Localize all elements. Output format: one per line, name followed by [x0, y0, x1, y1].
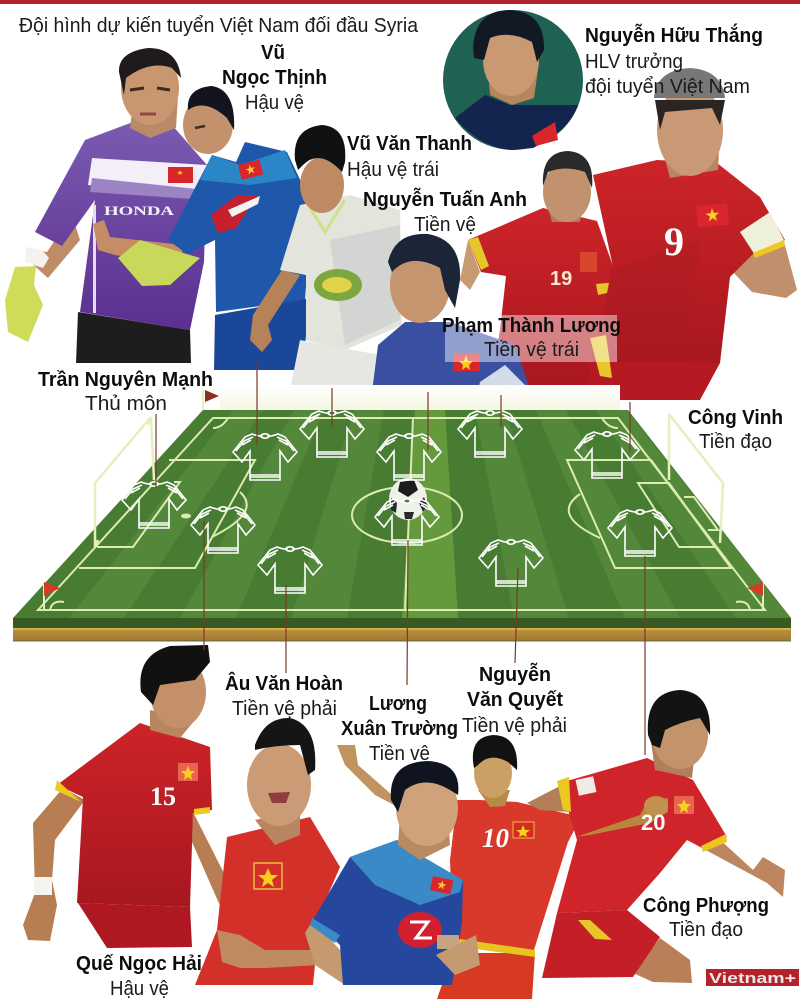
label: Công Phượng [643, 895, 769, 941]
shirt 8 [458, 410, 522, 457]
shirt 1 [122, 481, 186, 528]
label: Công Vinh: Tiền đạo [699, 431, 772, 453]
label: Công Phượng: Tiền đạo [669, 919, 743, 941]
jersey sponsor: HONDA [104, 203, 175, 218]
corner flag: bottom left [44, 582, 60, 610]
player photo: Xuân Trường (arm of Nguyễn Văn Quyết behind) [337, 745, 394, 805]
goal: left [95, 417, 154, 547]
top red bar [0, 0, 800, 4]
logo: Vietnam+ [706, 969, 799, 987]
label: Phạm Thành Lương: Phạm Thành Lương [442, 315, 621, 337]
label: Nguyễn Hữu Thắng [585, 23, 763, 98]
formation shirts [122, 410, 672, 593]
label: Lương Xuân Trường: Lương [369, 693, 427, 715]
player photo: Nguyễn Văn Quyết [437, 735, 581, 999]
label: Vũ Văn Thanh: Hậu vệ trái [347, 159, 439, 181]
label: Nguyễn Tuấn Anh: Tiền vệ [414, 214, 476, 236]
label: Phạm Thành Lương [442, 315, 621, 361]
shirt 3 [258, 546, 322, 593]
shirt 9 [479, 539, 543, 586]
label: Quế Ngọc Hải [76, 953, 202, 1000]
label: Vũ Ngọc Thịnh: Vũ [261, 42, 285, 64]
label: Vũ Văn Thanh [347, 133, 472, 181]
player photo: Âu Văn Hoàn [195, 718, 340, 985]
coach photo: Nguyễn Hữu Thắng [443, 10, 583, 150]
football pitch [13, 390, 791, 642]
shirt 10 [575, 431, 639, 478]
label: Vũ Ngọc Thịnh: Hậu vệ [245, 92, 304, 114]
label: Nguyễn Hữu Thắng: Nguyễn Hữu Thắng [585, 23, 763, 47]
corner flag: bottom right [747, 582, 763, 610]
label: Trần Nguyên Mạnh [38, 369, 213, 415]
title: Đội hình dự kiến tuyển Việt Nam đối đầu Syria [19, 15, 419, 37]
label: Âu Văn Hoàn: Âu Văn Hoàn [225, 671, 343, 695]
player photo: Công Vinh [587, 68, 797, 400]
label: Vũ Ngọc Thịnh: Ngọc Thịnh [222, 67, 327, 89]
label: Vũ Ngọc Thịnh [222, 42, 327, 114]
label: Nguyễn Hữu Thắng: HLV trưởng [585, 51, 683, 73]
player photo: Lương Xuân Trường [305, 761, 480, 985]
label: Công Phượng: Công Phượng [643, 895, 769, 917]
shirt 6 [377, 433, 441, 480]
label: Phạm Thành Lương: Tiền vệ trái [484, 339, 579, 361]
player photo: Nguyễn Văn Quyết: 10 [482, 823, 510, 853]
label: Âu Văn Hoàn: Tiền vệ phải [232, 698, 337, 720]
player photo: Vũ Ngọc Thịnh [93, 86, 312, 370]
shirt 11 [608, 509, 672, 556]
player photo: Quế Ngọc Hải: 15 [150, 782, 176, 811]
pitch turf [13, 410, 791, 618]
label: Lương Xuân Trường: Xuân Trường [341, 718, 458, 740]
turf stripes [69, 410, 791, 618]
label: Quế Ngọc Hải: Quế Ngọc Hải [76, 953, 202, 975]
pitch markings [38, 418, 765, 610]
label: Nguyễn Hữu Thắng: đội tuyển Việt Nam [585, 76, 750, 98]
player photo: Phạm Thành Lương: 19 [550, 268, 572, 290]
label: Âu Văn Hoàn [225, 671, 343, 720]
label: Lương Xuân Trường [341, 693, 458, 765]
player photo: Công Phượng: 20 [641, 810, 665, 835]
label: Trần Nguyên Mạnh: Trần Nguyên Mạnh [38, 369, 213, 391]
label: Công Vinh [688, 407, 783, 453]
player photo: Công Vinh: 9 [664, 219, 684, 264]
label: Nguyễn Tuấn Anh [363, 187, 527, 236]
shirt 5 [300, 410, 364, 457]
label: Vũ Văn Thanh: Vũ Văn Thanh [347, 133, 472, 155]
label: Nguyễn Văn Quyết: Nguyễn [479, 662, 551, 686]
player photo: Phạm Thành Lương [460, 151, 620, 392]
translucent plate behind Phạm Thành Lương [445, 315, 617, 362]
connector lines from shirts to players [156, 364, 645, 755]
shirt 2 [191, 506, 255, 553]
player photo: Trần Nguyên Mạnh (goalkeeper) [5, 48, 207, 363]
label: Lương Xuân Trường: Tiền vệ [369, 743, 430, 765]
label: Nguyễn Tuấn Anh: Nguyễn Tuấn Anh [363, 187, 527, 211]
player photo: Nguyễn Tuấn Anh [372, 234, 531, 392]
logo: Vietnam+: Vietnam+ [709, 970, 796, 987]
pitch side bands [13, 618, 791, 628]
shirt 7 [375, 498, 439, 545]
label: Nguyễn Văn Quyết [462, 662, 567, 737]
player photo: Quế Ngọc Hải [23, 645, 240, 948]
corner flag: top left [203, 390, 219, 410]
label: Nguyễn Văn Quyết: Văn Quyết [467, 689, 563, 711]
player photo: Vũ Văn Thanh [250, 125, 402, 390]
player photo: Công Phượng [527, 690, 785, 983]
ball [389, 478, 427, 520]
glow above pitch [220, 385, 620, 413]
label: Nguyễn Văn Quyết: Tiền vệ phải [462, 715, 567, 737]
label: Trần Nguyên Mạnh: Thủ môn [85, 393, 167, 415]
label: Quế Ngọc Hải: Hậu vệ [110, 978, 169, 1000]
label: Công Vinh: Công Vinh [688, 407, 783, 429]
shirt 4 [233, 433, 297, 480]
goal: right [669, 414, 723, 543]
penalty spot [181, 514, 191, 518]
